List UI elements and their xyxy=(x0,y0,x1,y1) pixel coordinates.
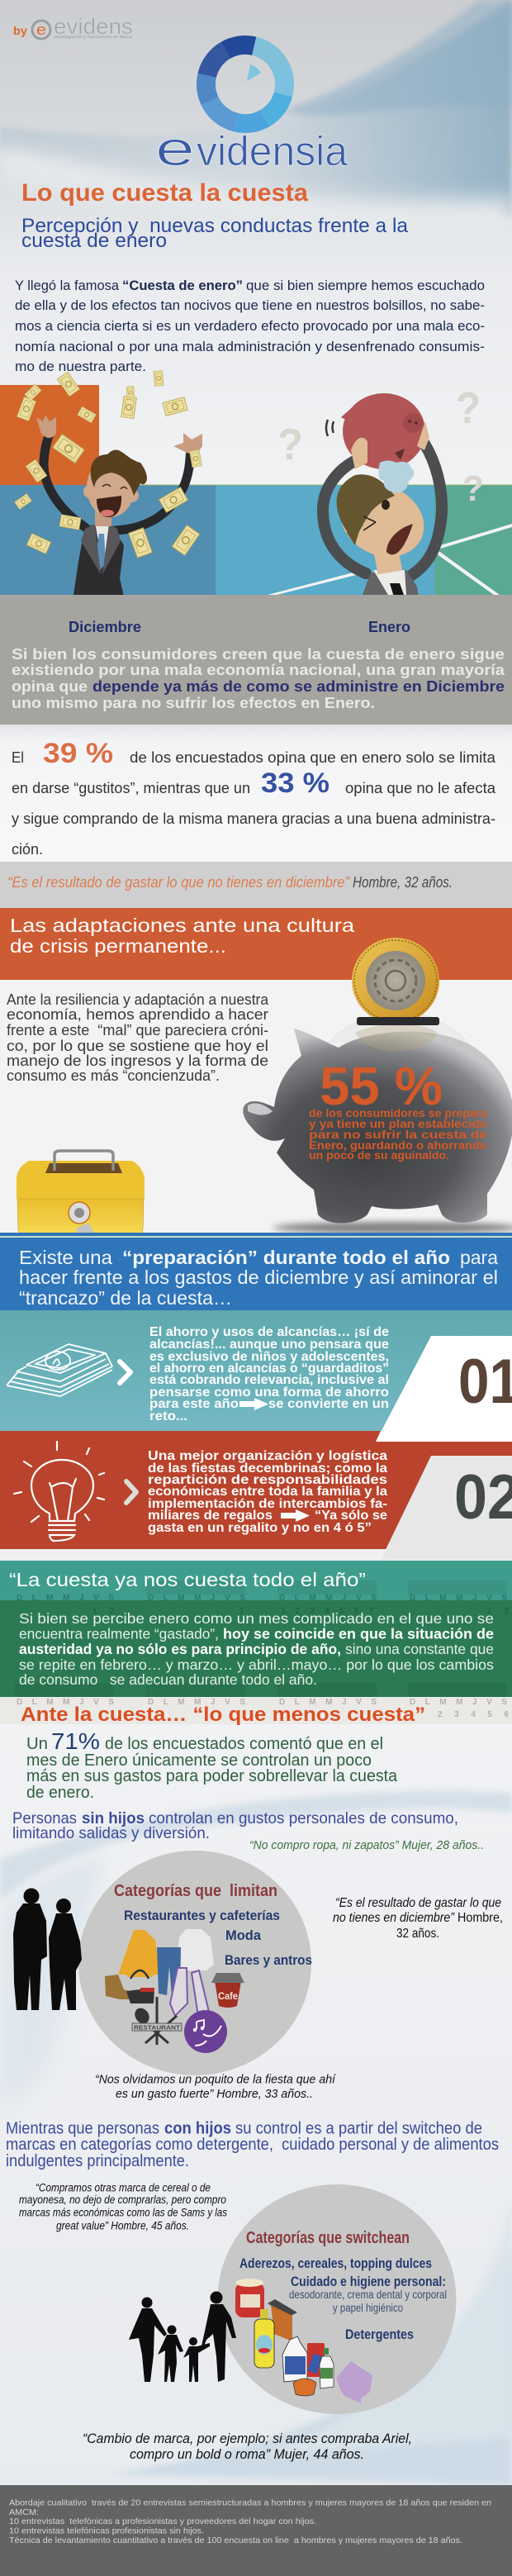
panel: survey statistics: y sigue comprando de la misma manera gracias a una buena administra- xyxy=(12,810,495,827)
icon: light bulb xyxy=(14,1442,104,1541)
quote: es el resultado: 32 años. xyxy=(396,1927,439,1941)
panel: adaptaciones heading: de crisis permanente... xyxy=(10,935,226,957)
faint calendars xyxy=(15,1580,509,1719)
quote: compramos otras marcas: great value” Hombre, 45 años. xyxy=(56,2219,189,2232)
character: worried man in January xyxy=(323,444,442,613)
text: Una mejor organización y logística xyxy=(148,1449,387,1463)
icon: red detergent box xyxy=(307,2343,325,2377)
category labels: Moda xyxy=(225,1927,262,1943)
panel: survey statistics: opina que no le afecta xyxy=(345,780,496,796)
faint calendars: D L M M J V S xyxy=(17,1698,114,1707)
text: 71%: de los encuestados comentó que en el xyxy=(105,1735,383,1753)
quote band xyxy=(0,862,512,908)
panel: survey statistics: El xyxy=(12,749,24,766)
faint calendars: 2 3 4 5 6 xyxy=(438,1710,509,1719)
text: está cobrando relevancia, inclusive al xyxy=(149,1373,389,1387)
panel: diciembre / enero illustration xyxy=(0,371,512,614)
heading: “La cuesta ya nos cuesta todo el año” xyxy=(9,1569,366,1590)
panel: survey statistics: en darse “gustitos”, mientras que un xyxy=(12,780,250,796)
text: personas con hijos: Mientras que personas xyxy=(6,2120,159,2138)
stat: 71%: 71% xyxy=(51,1728,100,1754)
logo: by evidens: e xyxy=(36,21,46,38)
icon: yellow jacket xyxy=(118,1930,160,1977)
icon: red piggy bank xyxy=(326,393,429,492)
logo wordmark: vidensia xyxy=(197,128,348,174)
title: Lo que cuesta la cuesta xyxy=(21,179,308,207)
faint calendars: D L M M J V S xyxy=(410,1594,507,1603)
text: personas sin hijos: sin hijos xyxy=(82,1809,145,1827)
faint calendars: 1 xyxy=(239,1607,244,1616)
paragraph: depende ya más de como se administre en Diciembre xyxy=(92,677,505,695)
stat: 39 %: 39 % xyxy=(43,738,113,769)
panel: preparación blue band: para xyxy=(460,1247,498,1268)
icon: white jug xyxy=(282,2336,307,2382)
parallelogram shadow xyxy=(376,1323,438,1438)
text: personas con hijos: indulgentes principalmente. xyxy=(6,2152,189,2170)
stat caption: y ya tiene un plan establecido xyxy=(309,1118,487,1130)
adaptaciones paragraph: manejo de los ingresos y la forma de xyxy=(7,1053,268,1069)
text: gasta en un regalito y no en 4 ó 5” xyxy=(148,1521,372,1535)
text: personas sin hijos xyxy=(12,1809,458,1842)
faint calendars: D L M M J V S xyxy=(17,1594,114,1603)
icon: toilet paper roll xyxy=(336,2361,372,2403)
panel: survey statistics: ción. xyxy=(12,841,43,858)
category labels: y papel higiénico xyxy=(333,2301,403,2314)
text: es exclusivo de niños y adolescentes, xyxy=(149,1350,389,1364)
icon: coffee cup: Cafe xyxy=(218,1990,238,2002)
intro paragraph xyxy=(15,278,485,374)
icon: restaurant cutlery xyxy=(132,1997,182,2045)
pig body xyxy=(243,1029,512,1223)
logo: by evidens: evidens xyxy=(54,14,133,39)
category labels: Restaurantes y cafeterías xyxy=(124,1908,280,1923)
faint calendars: D L M M J V S xyxy=(148,1594,245,1603)
icon: chevron xyxy=(120,1362,130,1383)
logo: by evidens: by xyxy=(13,24,27,37)
icons: question marks: ? xyxy=(462,468,484,509)
category labels: desodorante, crema dental y corporal xyxy=(289,2288,447,2301)
text: personas con hijos xyxy=(6,2120,499,2170)
paragraph: opina que xyxy=(12,677,88,695)
stat caption: para no sufrir la cuesta de xyxy=(309,1129,488,1141)
icon: jam jar xyxy=(235,2279,264,2317)
footer: methodology: Técnica de levantamiento cuantitativo a través de 100 encuesta on line a hombres y mujeres mayores de 18 años. xyxy=(9,2536,462,2545)
panel: preparación blue band: Existe una xyxy=(19,1247,112,1268)
quote: es el resultado: no tienes en diciembre” xyxy=(333,1911,455,1925)
paragraph: austeridad ya no sólo es para principio de año, xyxy=(19,1641,341,1657)
quote: cambio de marca: “Cambio de marca, por ejemplo; si antes compraba Ariel, xyxy=(83,2431,412,2446)
footer: methodology: Abordaje cualitativo través de 20 entrevistas semiestructuradas a hombres y mujeres mayores de 18 años que residen en xyxy=(9,2498,491,2508)
icon: coffee cup xyxy=(211,1973,244,2008)
adaptaciones paragraph: Ante la resiliencia y adaptación a nuestra xyxy=(7,991,269,1008)
text: miliares de regalos xyxy=(148,1509,273,1523)
logo: by evidens: Investigación y Consultoría de Marca xyxy=(54,35,133,39)
adaptaciones paragraph: frente a este “mal” que pareciera cróni- xyxy=(7,1022,268,1038)
icon: stack of money xyxy=(7,1344,112,1396)
quote: cambio de marca xyxy=(83,2431,412,2462)
faint calendars: D L M M J V S xyxy=(279,1698,377,1707)
category labels xyxy=(239,2255,447,2342)
stat caption xyxy=(309,1107,488,1162)
paragraph: Si bien los consumidores creen que la cuesta de enero sigue xyxy=(12,645,505,663)
icon: chevron xyxy=(126,1481,136,1503)
label: Diciembre: Diciembre xyxy=(69,618,141,635)
stat: 33 %: 33 % xyxy=(261,768,329,799)
text: alcancías!... aunque uno pensara que xyxy=(149,1338,389,1352)
quote band: Hombre, 32 años. xyxy=(353,874,453,891)
icon: cereal box xyxy=(268,2299,297,2341)
panel: preparación blue band: “preparación” durante todo el año xyxy=(122,1247,450,1268)
subtitle: Percepción y nuevas conductas frente a la xyxy=(21,215,408,237)
character: happy man in December xyxy=(36,415,202,614)
icon: sneakers xyxy=(170,1968,209,2016)
category labels: Cuidado e higiene personal: xyxy=(291,2274,446,2289)
logo: by evidens xyxy=(13,14,133,39)
adaptaciones paragraph: economía, hemos aprendido a hacer xyxy=(7,1006,268,1023)
intro paragraph: que si bien siempre hemos escuchado xyxy=(246,278,485,293)
intro paragraph: mo de nuestra parte. xyxy=(15,359,146,374)
panel: preparación blue band xyxy=(0,1233,512,1310)
coin xyxy=(352,938,439,1024)
quote: compramos otras marcas: marcas más económicas como las de Sams y las xyxy=(19,2207,227,2219)
text: para este año xyxy=(149,1397,239,1411)
silhouette: couple xyxy=(13,1889,82,2010)
paragraph: Si bien se percibe enero como un mes complicado en el que uno se xyxy=(19,1610,494,1627)
icons: question marks xyxy=(277,383,484,509)
icon: restaurant cutlery: RESTAURANT xyxy=(134,2026,181,2031)
footer: methodology: AMCM: xyxy=(9,2508,39,2517)
footer: methodology xyxy=(0,2485,512,2576)
quote: no compro ropa: “No compro ropa, ni zapatos” Mujer, 28 años.. xyxy=(249,1838,484,1852)
panel: point 01 xyxy=(0,1310,512,1442)
text: “Ya sólo se xyxy=(315,1509,387,1523)
logo: evidensia ring xyxy=(155,36,348,176)
adaptaciones paragraph xyxy=(7,991,269,1084)
icon: white shirt xyxy=(177,1929,214,1970)
paragraph: sino una constante que xyxy=(345,1641,494,1657)
panel: point 02 xyxy=(0,1431,512,1560)
circle heading: Categorías que limitan xyxy=(114,1882,277,1900)
quote: nos olvidamos: “Nos olvidamos un poquito de la fiesta que ahí xyxy=(95,2074,337,2087)
quote: compramos otras marcas: mayonesa, no dejo de comprarlas, pero compro xyxy=(19,2193,226,2206)
adaptaciones paragraph: co, por lo que se sostiene que hoy el xyxy=(7,1038,268,1054)
text: 71%: de enero. xyxy=(26,1784,94,1802)
icons: falling banknotes xyxy=(15,371,201,558)
panel: preparación blue band: “trancazo” de la cuesta… xyxy=(19,1287,232,1309)
intro paragraph: Y llegó la famosa xyxy=(15,278,120,293)
panel: grey band with month labels and paragraph xyxy=(0,595,512,725)
faint calendars: D L M M J V S xyxy=(148,1698,245,1707)
stat caption: un poco de su aguinaldo. xyxy=(309,1149,449,1162)
logo wordmark xyxy=(155,122,348,176)
circle heading: Categorías que switchean xyxy=(246,2229,410,2247)
illustration: yellow cash box xyxy=(17,1151,145,1250)
text xyxy=(148,1449,387,1535)
logo wordmark: e xyxy=(155,122,195,176)
text xyxy=(149,1325,389,1423)
stat caption: Enero, guardando o ahorrando xyxy=(309,1139,487,1152)
text: personas con hijos: con hijos xyxy=(164,2120,231,2138)
text: personas sin hijos: Personas xyxy=(12,1809,77,1827)
text: implementación de intercambios fa- xyxy=(148,1497,387,1511)
silhouette: family xyxy=(129,2292,236,2382)
quote: cambio de marca: compro un bold o roma” Mujer, 44 años. xyxy=(130,2446,364,2462)
panel: adaptaciones heading xyxy=(0,908,512,980)
icons: question marks: ? xyxy=(456,383,481,433)
text: el ahorro en alcancías o “guardaditos” xyxy=(149,1362,389,1376)
icon: orange bowl xyxy=(293,2379,316,2396)
quote: compramos otras marcas: “Compramos otras marca de cereal o de xyxy=(36,2181,211,2194)
text: 71%: Un xyxy=(26,1735,48,1753)
text: personas con hijos: su control es a partir del switcheo de xyxy=(235,2120,482,2138)
footer: methodology: 10 entrevistas telefónicas profesionistas sin hijos. xyxy=(9,2527,204,2536)
category labels xyxy=(124,1908,312,1968)
faint calendars: 1 2 3 4 5 6 7 xyxy=(281,1607,373,1616)
panel: la cuesta todo el año xyxy=(0,1561,512,1719)
text: repartición de responsabilidades xyxy=(148,1473,387,1487)
category labels: Aderezos, cereales, topping dulces xyxy=(239,2255,432,2271)
icon: yellow bottle xyxy=(254,2309,274,2368)
colour blocks xyxy=(0,385,512,595)
intro paragraph: “Cuesta de enero” xyxy=(122,278,243,293)
paragraph: hoy se coincide en que la situación de xyxy=(223,1626,494,1642)
text: 71% xyxy=(26,1728,398,1802)
icons: question marks: ? xyxy=(277,420,303,469)
panel: categorías que limitan xyxy=(78,1851,312,2075)
text: personas sin hijos: limitando salidas y diversión. xyxy=(12,1824,210,1842)
text: se convierte en un xyxy=(268,1397,389,1411)
paragraph: existiendo por una mala economía nacional, una gran mayoría xyxy=(12,661,505,678)
illustration: glass piggy bank with coin xyxy=(243,938,512,1233)
subtitle: cuesta de enero xyxy=(21,230,167,252)
key xyxy=(76,1223,116,1250)
quote: nos olvidamos xyxy=(95,2074,337,2101)
quote band: “Es el resultado de gastar lo que no tienes en diciembre” xyxy=(7,874,350,891)
icon: jeans xyxy=(157,1947,181,1995)
text: 71%: más en sus gastos para poder sobrellevar la cuesta xyxy=(26,1767,398,1785)
paragraph: de consumo se adecuan durante todo el año. xyxy=(19,1671,317,1688)
stat: 55 %: 55 % xyxy=(320,1056,443,1116)
icon: handbag xyxy=(126,1970,154,2003)
number tab 01 xyxy=(376,1336,512,1442)
faint calendars: 1 2 xyxy=(92,1607,114,1616)
text: personas sin hijos: controlan en gustos personales de consumo, xyxy=(149,1809,458,1827)
stat caption: de los consumidores se prepara xyxy=(309,1107,488,1119)
text: 71%: mes de Enero únicamente se controlan un poco xyxy=(26,1751,372,1770)
text: reto... xyxy=(149,1409,187,1423)
text: de las fiestas decembrinas; como la xyxy=(148,1461,387,1476)
faint calendars: D L M M J V S xyxy=(410,1698,507,1707)
panel: categorías que switchean xyxy=(218,2184,456,2414)
heading: lo que menos cuesta: Ante la cuesta… “lo que menos cuesta” xyxy=(21,1704,425,1726)
quote: nos olvidamos: es un gasto fuerte” Hombre, 33 años.. xyxy=(116,2088,313,2101)
intro paragraph: nomía nacional o por una mala administración y desenfrenado consumis- xyxy=(15,339,485,354)
text: El ahorro y usos de alcancías… ¡sí de xyxy=(149,1325,389,1339)
icon: music and drink badge xyxy=(184,2010,227,2053)
icon: boot xyxy=(105,1975,137,1999)
text: pensarse como una forma de ahorro xyxy=(149,1385,389,1400)
number tab 02 xyxy=(381,1456,512,1560)
label: Enero: Enero xyxy=(368,618,410,635)
quote: es el resultado xyxy=(333,1896,503,1941)
icon: bleach bottle xyxy=(320,2348,334,2388)
panel: preparación blue band: hacer frente a los gastos de diciembre y así aminorar el xyxy=(19,1267,498,1288)
intro paragraph: mos a ciencia cierta si es un verdadero efecto provocado por una mala eco- xyxy=(15,318,485,334)
faint calendars: D L M M J V S xyxy=(279,1594,377,1603)
panel: survey statistics: de los encuestados opina que en enero solo se limita xyxy=(130,749,496,766)
paragraph xyxy=(19,1610,494,1688)
quote: compramos otras marcas xyxy=(19,2181,227,2232)
number tab 01 overlap xyxy=(376,1431,512,1442)
paragraph: uno mismo para no sufrir los efectos en Enero. xyxy=(12,694,375,711)
paragraph xyxy=(12,645,505,711)
category labels: Detergentes xyxy=(345,2326,414,2342)
adaptaciones paragraph: consumo es más “concienzuda”. xyxy=(7,1067,220,1084)
paragraph: se repite en febrero… y marzo… y abril…mayo… por lo que los cambios xyxy=(19,1656,494,1673)
paragraph: encuentra realmente “gastado”, xyxy=(19,1626,219,1642)
panel: survey statistics xyxy=(0,725,512,862)
category labels: Bares y antros xyxy=(225,1952,312,1968)
quote: es el resultado: Hombre, xyxy=(457,1911,503,1925)
text: económicas entre toda la familia y la xyxy=(148,1485,387,1499)
faint calendars: 1 2 xyxy=(487,1607,509,1616)
intro paragraph: de ella y de los efectos tan nocivos que tiene en nuestros bolsillos, no sabe- xyxy=(15,297,485,313)
subtitle xyxy=(21,215,408,252)
footer: methodology: 10 entrevistas telefónicas a profesionistas y proveedores del hogar con hijos. xyxy=(9,2517,316,2526)
panel: adaptaciones heading: Las adaptaciones ante una cultura xyxy=(10,915,355,936)
